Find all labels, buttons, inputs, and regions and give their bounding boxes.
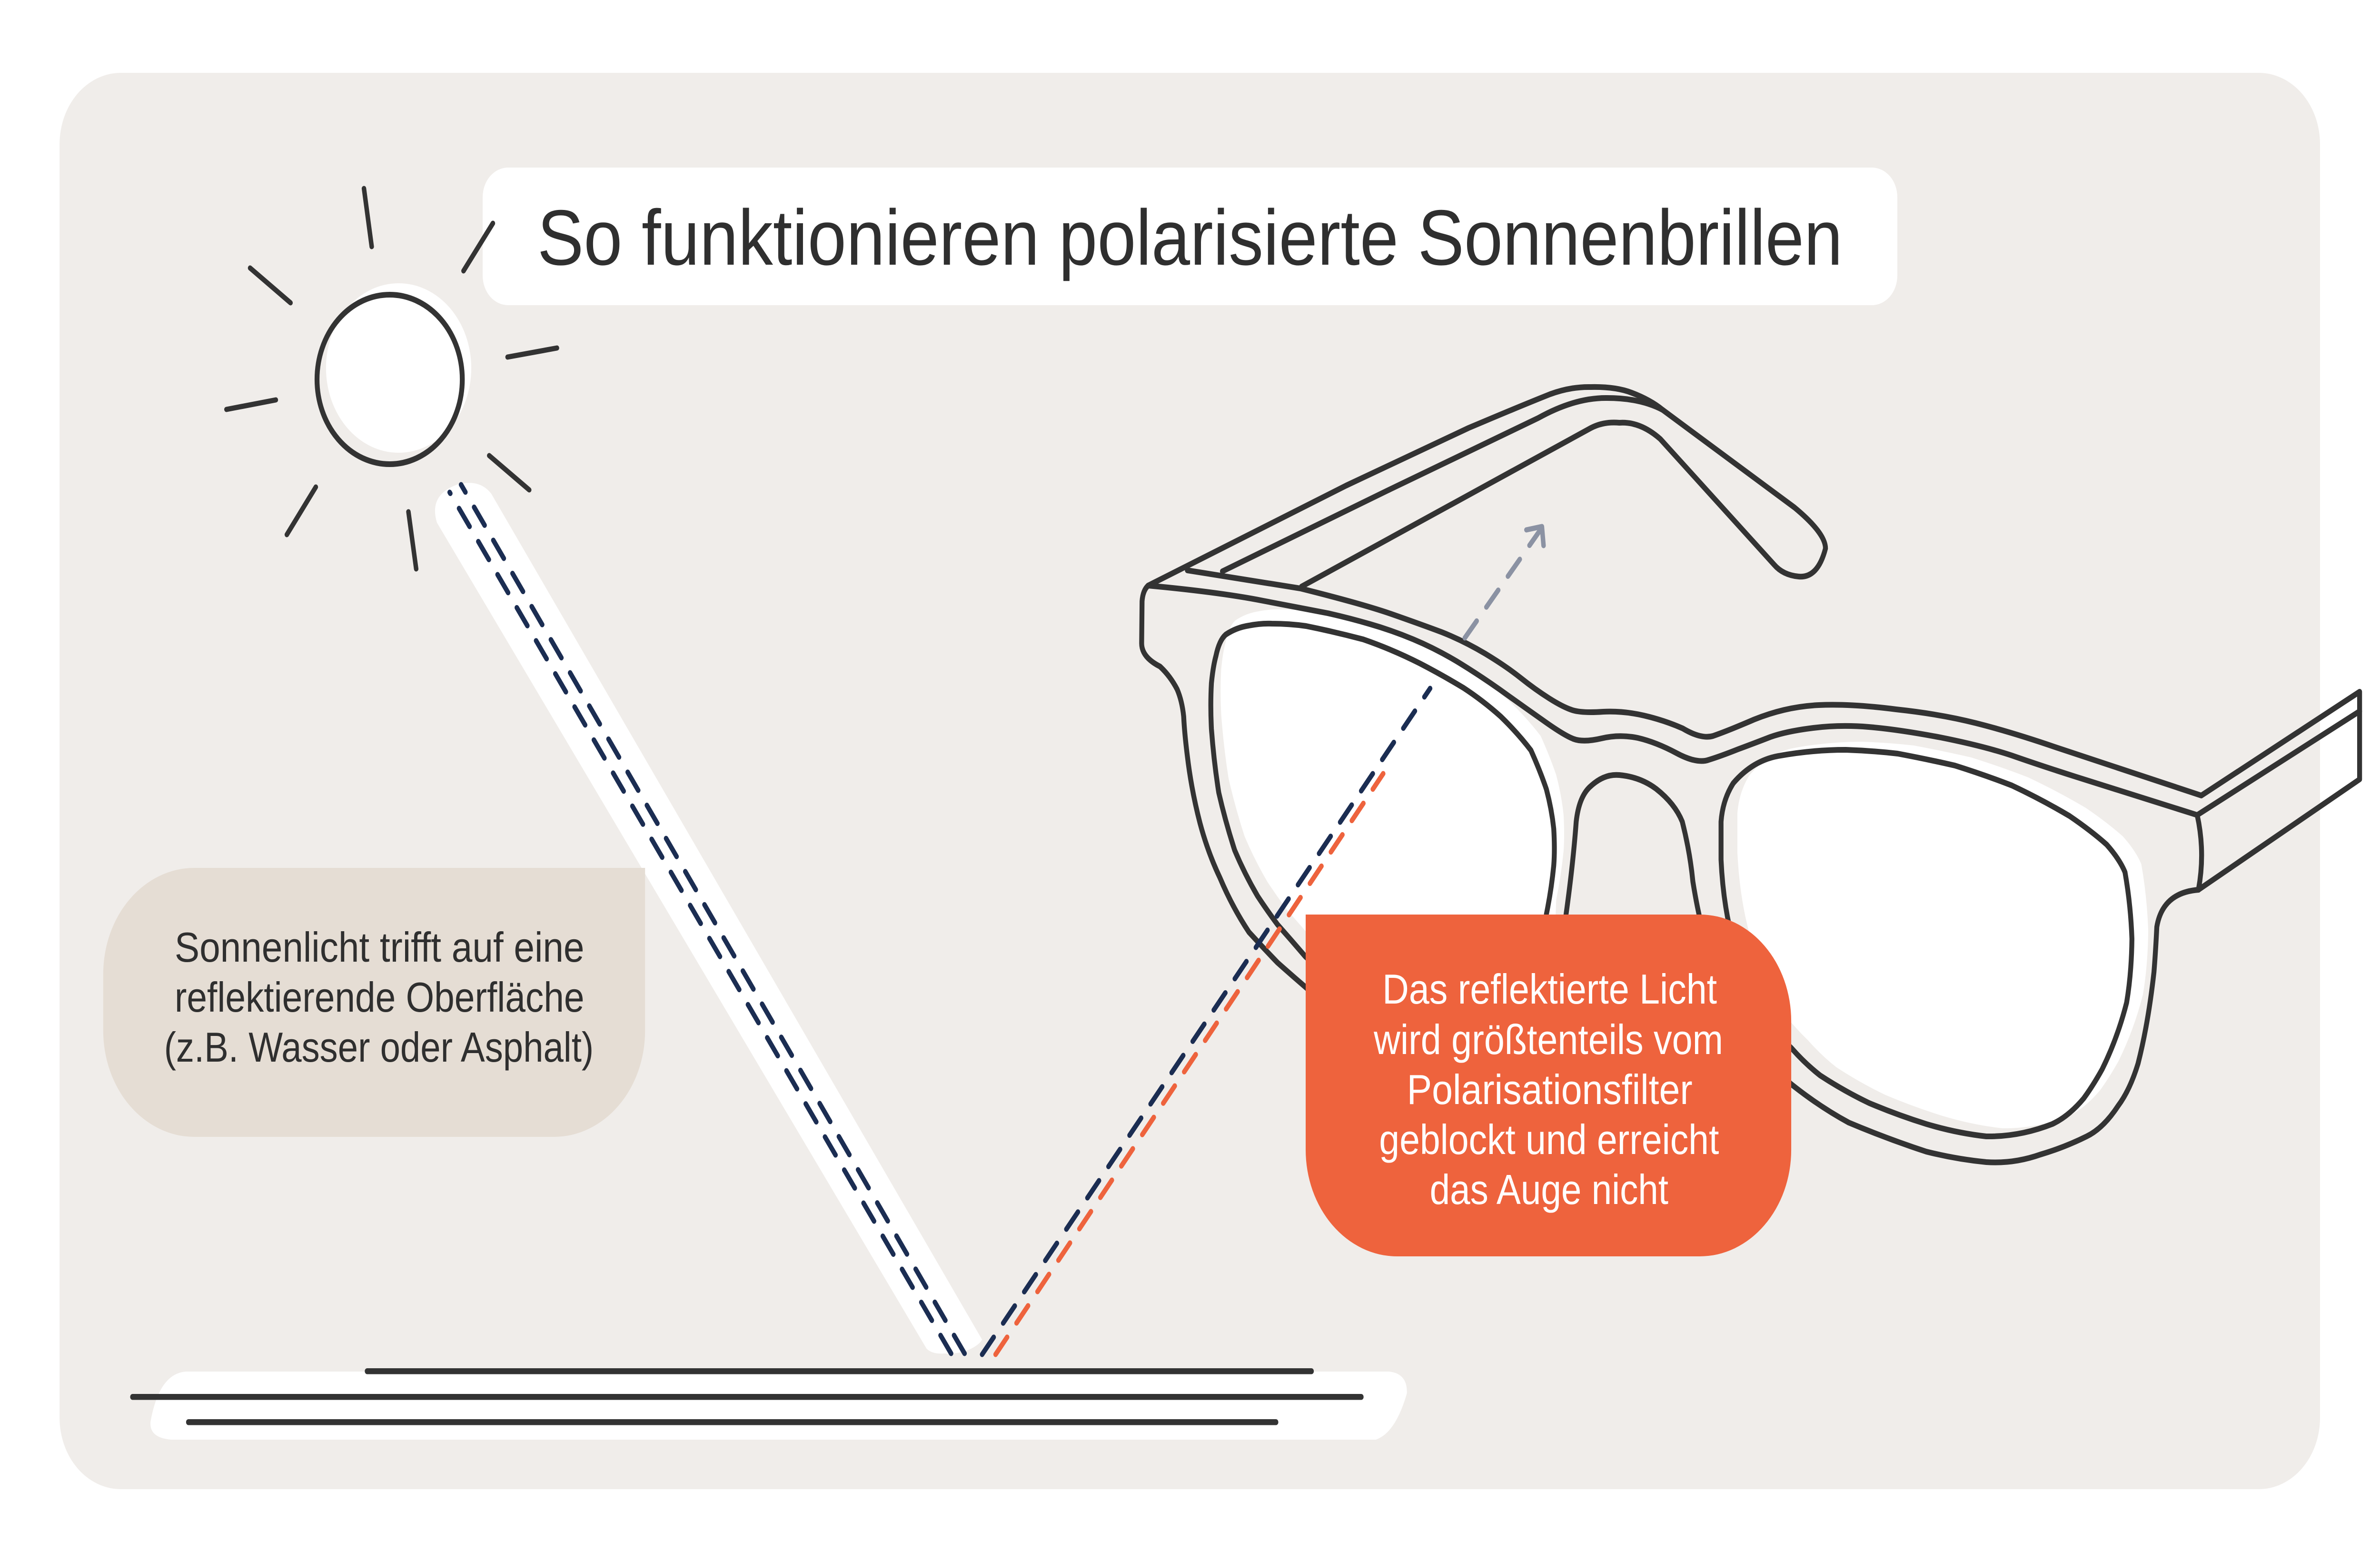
- right lens: [1721, 742, 2148, 1136]
- callout: surface: (z.B. Wasser oder Asphalt): [164, 1025, 594, 1071]
- temple arm inner edge: [1222, 398, 1663, 571]
- callout: polarising filter: das Auge nicht: [1430, 1167, 1668, 1213]
- arrow: filtered light to the eye: [1465, 527, 1544, 638]
- incoming light beam: [435, 483, 982, 1353]
- sunglasses: [1141, 387, 2360, 1163]
- frame top edge and near temple: [1187, 570, 2360, 890]
- callout: polarising filter: wird größtenteils vom: [1373, 1017, 1723, 1063]
- title: [483, 168, 1897, 305]
- callout: polarising filter: Polarisationsfilter: [1407, 1067, 1693, 1113]
- icon: sun: [227, 189, 557, 569]
- title: So funktionieren polarisierte Sonnenbrillen: [537, 194, 1843, 281]
- frame second edge: [1148, 586, 2360, 815]
- right hinge: [2197, 815, 2202, 890]
- frame lower left outline: [1141, 586, 1330, 1009]
- left lens: [1211, 609, 1564, 1024]
- callout: surface: [103, 868, 645, 1137]
- callout: polarising filter: [1306, 915, 1791, 1256]
- reflective surface: [130, 1368, 1407, 1440]
- far temple arm: [1148, 387, 1825, 587]
- callout: polarising filter: geblockt und erreicht: [1379, 1117, 1719, 1163]
- callout: polarising filter: Das reflektierte Licht: [1382, 966, 1717, 1013]
- nose bridge: [1565, 775, 1701, 924]
- reflected light: navy dashed line: [982, 688, 1430, 1354]
- reflected light: orange dashed line: [996, 774, 1383, 1354]
- callout: surface: Sonnenlicht trifft auf eine: [175, 925, 584, 971]
- callout: surface: reflektierende Oberfläche: [175, 975, 584, 1021]
- frame lower right outline: [1771, 890, 2199, 1163]
